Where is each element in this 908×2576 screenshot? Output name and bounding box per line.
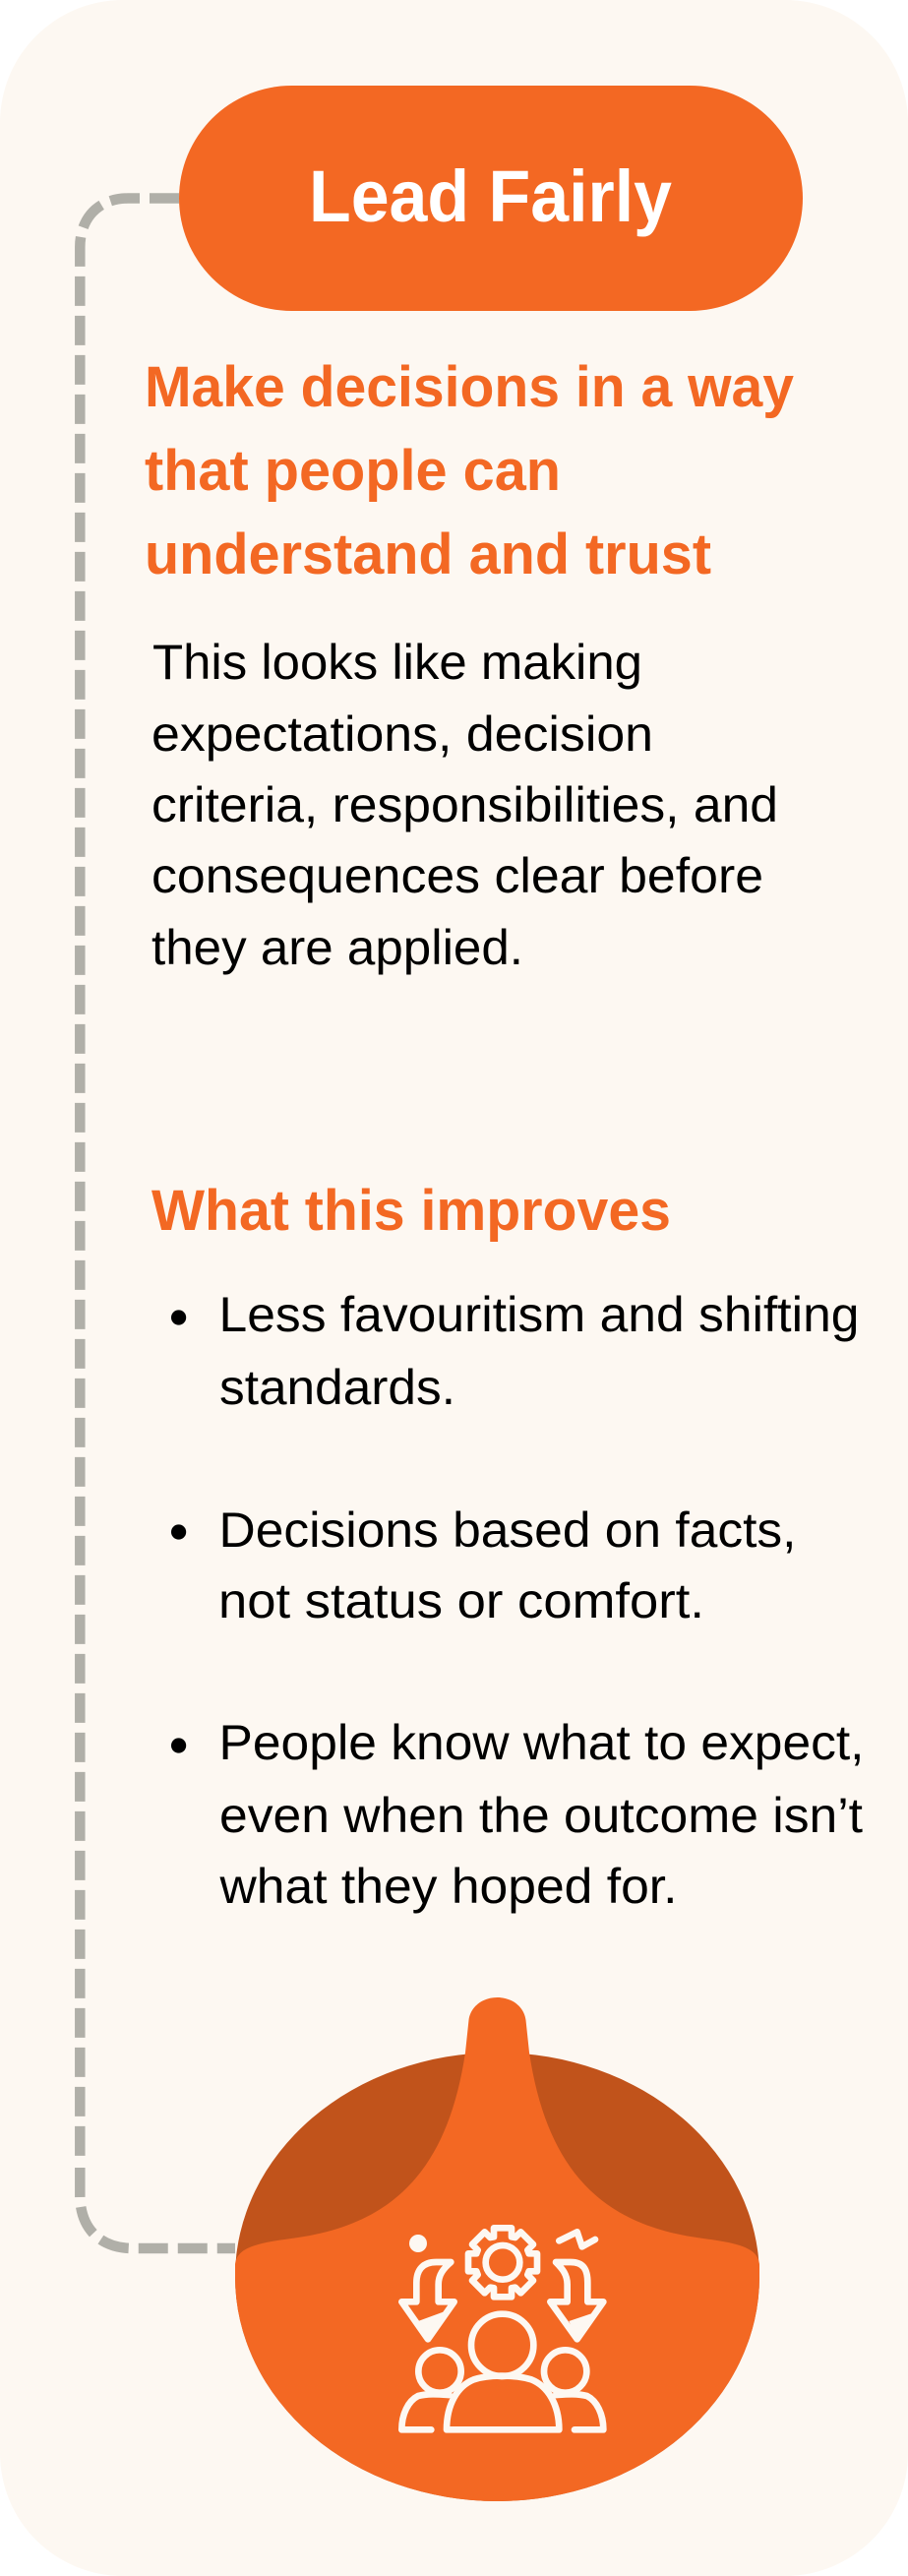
title: Lead Fairly (309, 155, 672, 237)
dashed connector: pill to drop (80, 199, 235, 2248)
bullet 1: Less favouritism and shifting (218, 1287, 860, 1342)
bullet 3: People know what to expect, (218, 1715, 864, 1770)
bullet 3: even when the outcome isn’t (219, 1788, 863, 1843)
heading: decisions statement: Make decisions in a way (145, 355, 794, 419)
bullet 1 (171, 1287, 860, 1415)
bullet 3: what they hoped for. (218, 1859, 678, 1914)
bullet 2 (171, 1503, 797, 1628)
body paragraph: expectations, decision (151, 706, 653, 762)
heading: decisions statement: that people can (145, 439, 561, 503)
heading: decisions statement (145, 355, 794, 586)
body paragraph: criteria, responsibilities, and (151, 777, 778, 832)
body paragraph (151, 635, 778, 975)
bullet 2: Decisions based on facts, (218, 1503, 797, 1558)
body paragraph: consequences clear before (151, 848, 763, 903)
title pill (179, 86, 803, 311)
body paragraph: This looks like making (152, 635, 642, 690)
bullet 2: not status or comfort. (218, 1573, 704, 1628)
subheading: what this improves: What this improves (151, 1179, 671, 1243)
heading: decisions statement: understand and trust (145, 522, 711, 586)
bullet 3 (171, 1715, 864, 1914)
icon: team with gear and arrows (401, 2228, 603, 2429)
drop badge (235, 1997, 759, 2501)
bullet 1: standards. (219, 1360, 455, 1415)
bullet list (171, 1287, 864, 1914)
body paragraph: they are applied. (151, 920, 523, 975)
